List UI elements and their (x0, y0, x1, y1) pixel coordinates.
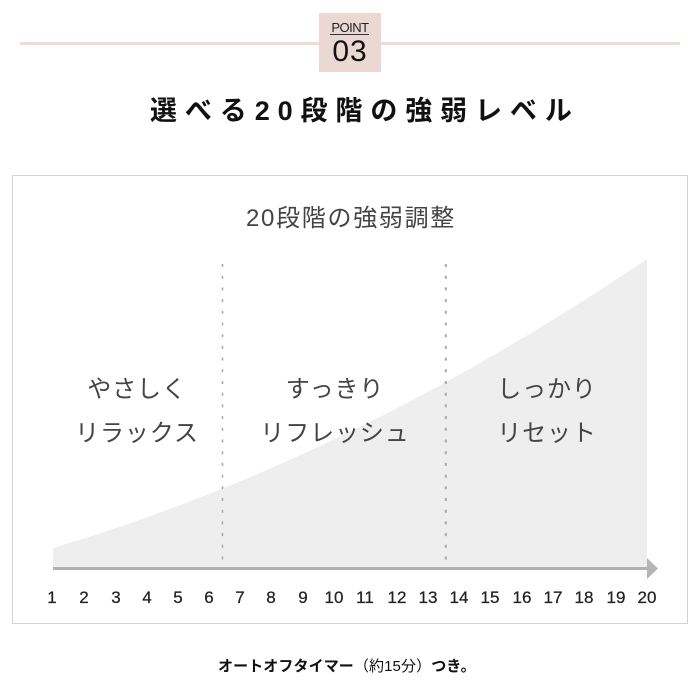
panel: chart (12, 175, 688, 624)
axis line (53, 567, 649, 570)
label: relax: やさしく (87, 376, 187, 403)
label: relax (75, 376, 199, 447)
label: reset: リセット (497, 420, 597, 447)
axis numbers: 3 (111, 588, 121, 607)
axis numbers: 8 (266, 588, 276, 607)
title: 選べる20段階の強弱レベル (150, 96, 580, 126)
label: refresh: すっきり (286, 376, 384, 403)
label: refresh: リフレッシュ (260, 420, 410, 447)
badge label: POINT (331, 20, 369, 35)
axis numbers: 9 (298, 588, 308, 607)
footnote: オートオフタイマー（約15分）つき。 (218, 658, 476, 675)
axis numbers: 15 (481, 588, 499, 607)
badge underline (330, 34, 369, 35)
header rule (20, 42, 680, 45)
axis numbers: 11 (356, 588, 374, 607)
axis numbers: 16 (513, 588, 531, 607)
axis numbers: 4 (142, 588, 152, 607)
label: reset: しっかり (497, 376, 597, 403)
axis numbers: 20 (638, 588, 656, 607)
axis numbers: 7 (235, 588, 245, 607)
point badge (319, 13, 381, 72)
axis arrow (647, 558, 658, 579)
axis numbers: 14 (450, 588, 468, 607)
label: refresh (260, 376, 410, 447)
axis numbers: 5 (173, 588, 183, 607)
area curve (53, 259, 647, 567)
divider right (445, 264, 447, 567)
axis numbers: 17 (544, 588, 562, 607)
axis numbers: 10 (325, 588, 343, 607)
badge number: 03 (332, 35, 368, 68)
axis numbers: 12 (388, 588, 406, 607)
axis numbers: 18 (575, 588, 593, 607)
label: reset (497, 376, 597, 447)
label: relax: リラックス (75, 420, 199, 447)
axis numbers: 19 (607, 588, 625, 607)
divider left (222, 264, 224, 567)
axis numbers: 13 (419, 588, 437, 607)
axis numbers: 6 (204, 588, 214, 607)
axis numbers (47, 588, 656, 607)
chart heading: 20段階の強弱調整 (246, 205, 456, 232)
axis numbers: 2 (79, 588, 89, 607)
axis numbers: 1 (47, 588, 57, 607)
